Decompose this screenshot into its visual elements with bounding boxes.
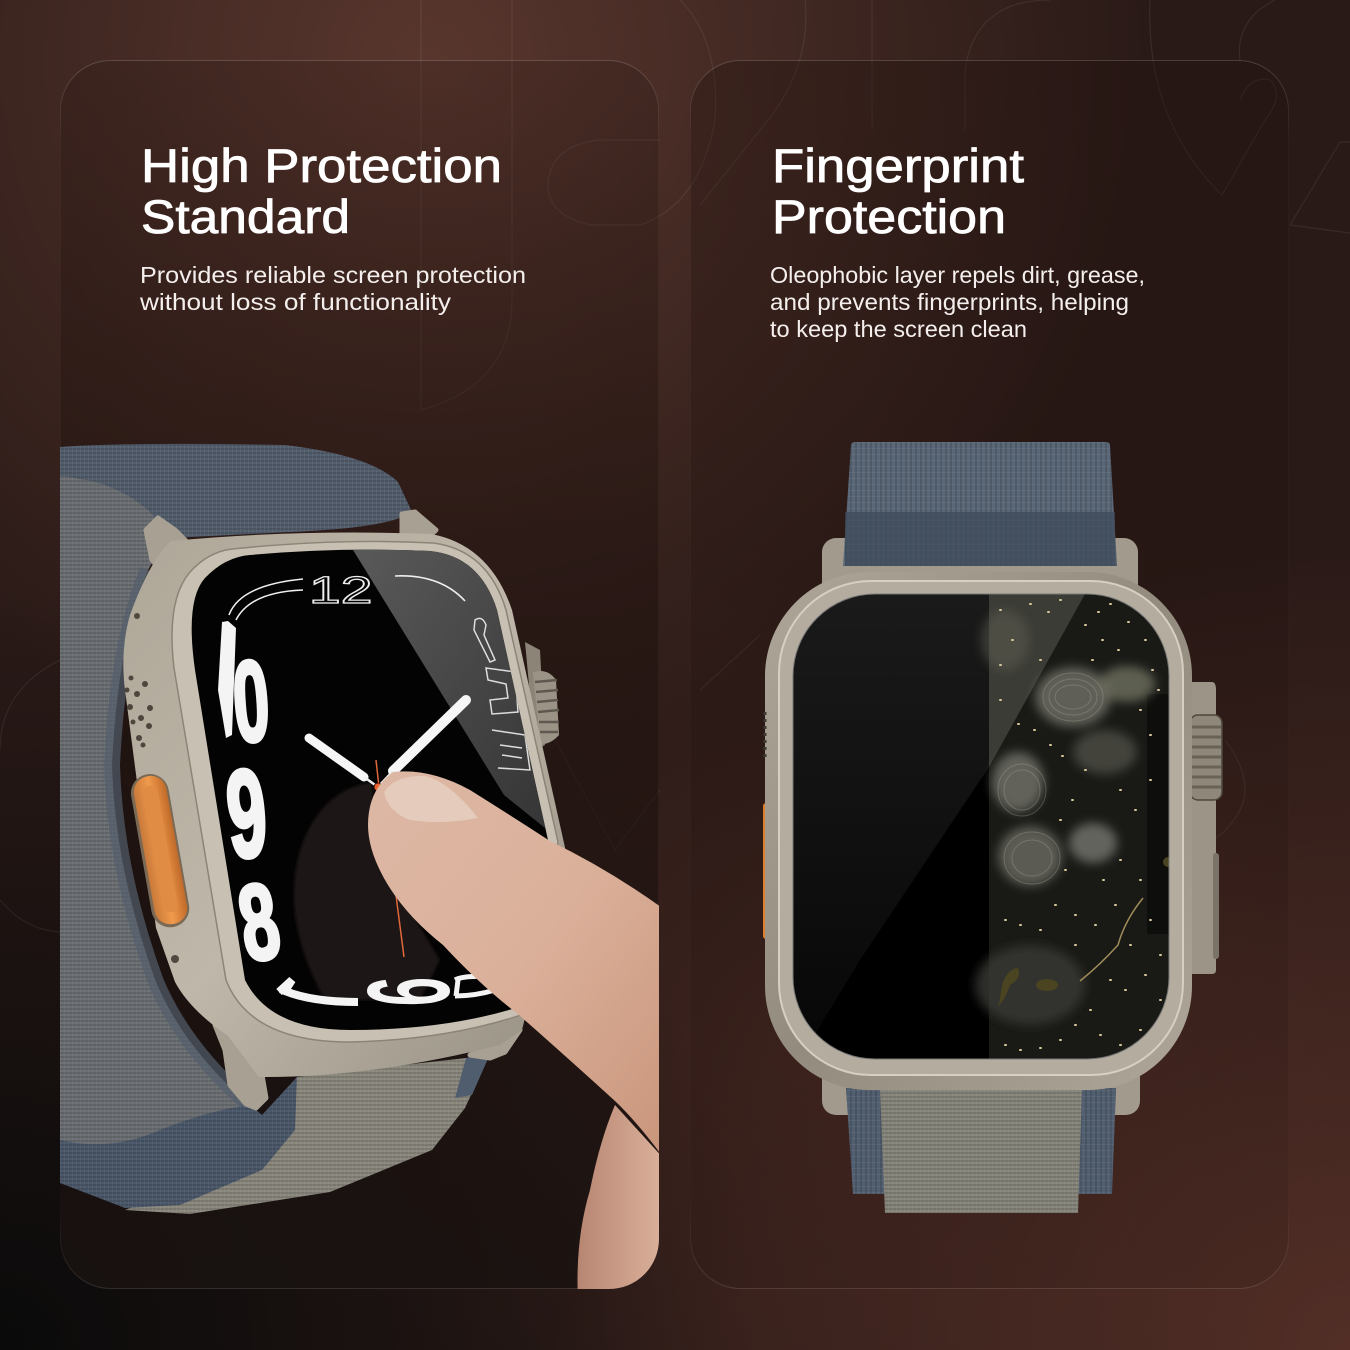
seconds hand upper — [376, 760, 379, 787]
right numerals outline — [474, 618, 530, 770]
second finger — [578, 1105, 659, 1289]
numeral 1 bar of 10 — [218, 621, 236, 738]
screen — [192, 550, 548, 1030]
dust specks — [1000, 600, 1161, 1050]
center pin — [374, 783, 382, 791]
orange button edge — [763, 803, 769, 939]
dirty half with fingerprints — [975, 594, 1173, 1059]
background outline pattern — [0, 0, 1350, 932]
heading: Protection — [772, 190, 1006, 243]
numeral 7 sweep — [279, 980, 358, 1002]
heading: Fingerprint — [772, 139, 1024, 192]
panel card — [60, 60, 658, 1288]
case screw holes — [134, 613, 179, 963]
clean half — [793, 594, 989, 1059]
orange action button — [130, 774, 190, 928]
heading: High Protection — [141, 139, 502, 192]
oil spots — [998, 857, 1173, 1006]
lugs — [822, 538, 1140, 1115]
strap: top blue band — [60, 444, 412, 538]
hand connectors — [366, 774, 390, 786]
side button block — [1185, 682, 1216, 974]
seconds hand lower — [395, 896, 405, 958]
panel: fingerprint protection — [690, 60, 1288, 1288]
heading: Standard — [141, 190, 350, 243]
watch face — [218, 545, 560, 1006]
numeral 12: 12 — [309, 569, 372, 612]
numeral 8: 8 — [230, 860, 288, 986]
digital crown — [1190, 715, 1222, 800]
fingerprint ridges — [998, 673, 1103, 884]
screen edge highlight — [793, 594, 1169, 1059]
panel: high protection standard — [60, 60, 665, 1300]
glass reflection — [353, 550, 546, 828]
bottom strap — [846, 1088, 1116, 1213]
watch case — [123, 533, 566, 1077]
description text: Oleophobic layer repels dirt, grease, — [770, 262, 1145, 288]
clock hand short — [309, 738, 364, 777]
inner bezel — [172, 541, 558, 1042]
description text: to keep the screen clean — [770, 316, 1027, 342]
clock hand long — [393, 700, 466, 771]
description text: and prevents fingerprints, helping — [770, 289, 1129, 315]
numeral 5 — [455, 976, 495, 996]
panel card — [690, 60, 1288, 1288]
description text: Provides reliable screen protection — [140, 262, 526, 288]
glass reflection — [989, 594, 1085, 767]
top strap — [843, 442, 1117, 566]
description text: without loss of functionality — [139, 289, 452, 315]
heading — [141, 139, 502, 243]
strap: blue lower band — [60, 1077, 297, 1208]
smudges — [975, 610, 1155, 1025]
screen — [793, 594, 1169, 1059]
screen halves — [793, 594, 1173, 1059]
watch case — [765, 572, 1192, 1090]
numeral 9: 9 — [221, 744, 272, 885]
watch crown — [525, 642, 559, 750]
watch lugs — [146, 512, 520, 1108]
watch photo with finger touching screen — [60, 444, 665, 1300]
speaker ticks — [764, 712, 766, 760]
strap: grey lower band — [125, 1054, 490, 1214]
finger shadow on glass — [294, 782, 440, 1000]
bezel ring — [779, 581, 1183, 1075]
speaker holes — [124, 676, 153, 748]
front view watch — [763, 442, 1222, 1213]
numeral 0: 0 — [229, 636, 273, 767]
numeral 6: 6 — [344, 977, 475, 1006]
heading — [772, 139, 1024, 243]
strap: rear grey loop — [60, 475, 250, 1149]
description text — [139, 262, 526, 315]
gold streak — [1080, 898, 1143, 981]
minute marker arcs — [229, 576, 465, 620]
lower side button — [1213, 853, 1219, 959]
description text — [770, 262, 1145, 342]
fingernail — [384, 776, 478, 822]
pointing finger — [368, 771, 665, 1160]
